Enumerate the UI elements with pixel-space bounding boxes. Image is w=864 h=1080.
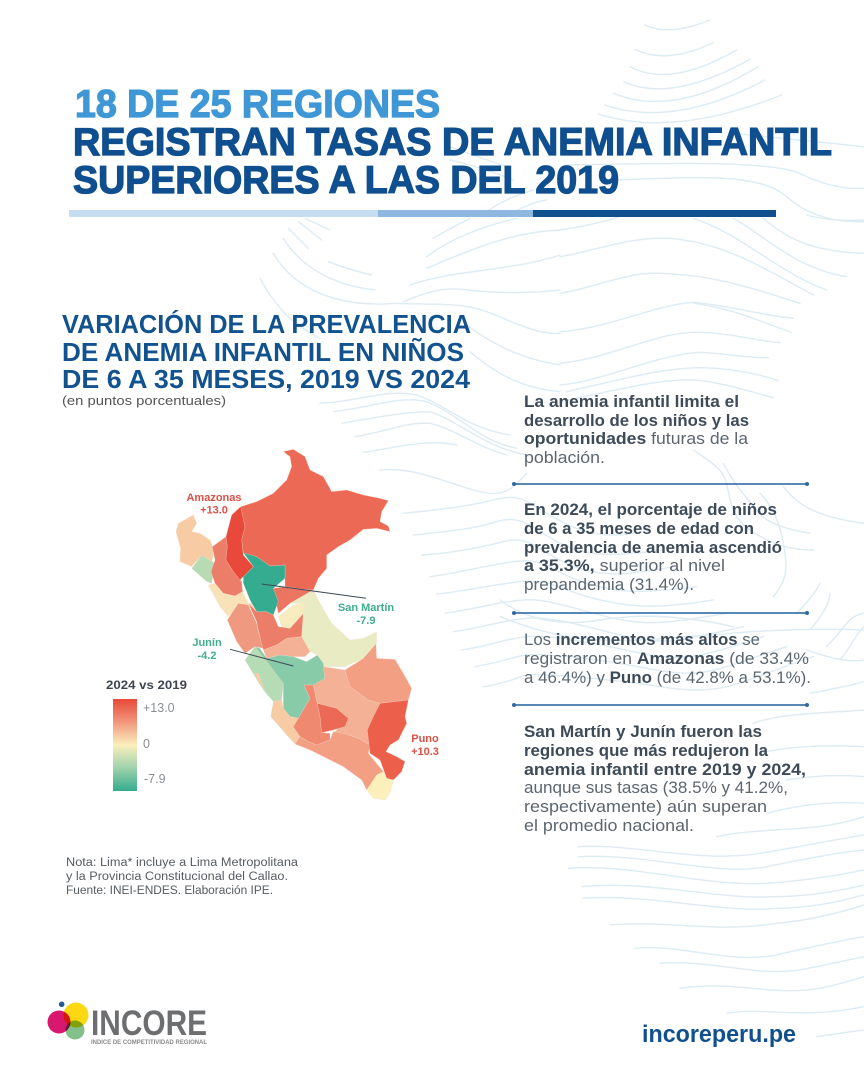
chart heading: DE ANEMIA INFANTIL EN NIÑOS [62, 337, 464, 367]
paragraph 1 [524, 393, 749, 467]
title: REGISTRAN TASAS DE ANEMIA INFANTIL [73, 121, 832, 164]
chart heading: DE 6 A 35 MESES, 2019 VS 2024 [62, 366, 471, 394]
paragraph 1: oportunidades futuras de la [524, 430, 749, 448]
paragraph 1: La anemia infantil limita el [524, 393, 739, 411]
chart heading [62, 309, 471, 394]
legend: +13.0 [143, 701, 175, 715]
title underline bar [69, 210, 776, 217]
paragraph 4: anemia infantil entre 2019 y 2024, [524, 761, 806, 779]
region: cream central [278, 603, 305, 628]
region: coast strip [254, 673, 265, 692]
paragraph 2 [524, 501, 782, 594]
region: Arequipa [295, 732, 383, 790]
label: Puno: +10.3 [411, 746, 439, 758]
label: San Martin [338, 602, 394, 627]
region: San Martin [243, 553, 285, 615]
leader line: San Martin [262, 584, 366, 598]
paragraph 4: San Martín y Junín fueron las [524, 723, 762, 741]
paragraph 1: población. [524, 449, 605, 467]
icon: overlapping circles [48, 1002, 88, 1040]
region: Tacna [367, 772, 393, 800]
footnote [66, 857, 299, 897]
region: Cajamarca [211, 537, 243, 596]
paragraph 4: regiones que más redujeron la [524, 742, 769, 760]
paragraph 2: prepandemia (31.4%). [524, 576, 694, 594]
leader line: Junin [230, 649, 293, 666]
legend [106, 680, 187, 791]
region: Ica [271, 700, 300, 744]
label: San Martin: San Martín [338, 602, 394, 614]
region: Piura [176, 515, 213, 567]
paragraph 3: registraron en Amazonas (de 33.4% [524, 650, 809, 668]
region: Cusco [313, 667, 380, 745]
footnote: y la Provincia Constitucional del Callao. [66, 871, 288, 883]
logo: INCORE [48, 1002, 207, 1046]
region: Apurimac [317, 703, 348, 733]
website: incoreperu.pe [642, 1021, 796, 1048]
paragraph 4 [524, 723, 806, 835]
label: Junin: -4.2 [198, 650, 216, 662]
region: Ucayali [290, 590, 377, 667]
logo: INCORE: INCORE [91, 1004, 207, 1043]
paragraph 2: de 6 a 35 meses de edad con [524, 520, 754, 538]
title: 18 DE 25 REGIONES [75, 83, 440, 126]
region: Ucayali norte [273, 587, 313, 613]
legend: 0 [143, 737, 150, 751]
paragraph 3: Los incrementos más altos se [524, 631, 760, 649]
logo: INCORE: INDICE DE COMPETITIVIDAD REGIONAL [91, 1040, 207, 1046]
divider [512, 611, 809, 615]
paragraph 1: desarrollo de los niños y las [524, 412, 749, 430]
footnote: Fuente: INEI-ENDES. Elaboración IPE. [66, 885, 273, 897]
label: Junin [192, 637, 222, 662]
region: Puno [367, 700, 408, 780]
paragraph 2: a 35.3%, superior al nivel [524, 557, 725, 575]
region: Madre de Dios [345, 644, 412, 703]
paragraph 3 [524, 631, 811, 687]
label: Puno: Puno [411, 733, 439, 745]
legend: -7.9 [144, 772, 166, 786]
region: Lambayeque [192, 555, 215, 583]
region: Lima [245, 647, 283, 702]
paragraph 3: a 46.4%) y Puno (de 42.8% a 53.1%). [524, 669, 811, 687]
region: Ayacucho [293, 685, 330, 745]
label: Amazonas [186, 492, 242, 516]
region: Pasco [263, 637, 310, 658]
title [73, 83, 832, 202]
region: Ancash [227, 603, 263, 653]
label: Junin: Junín [192, 637, 222, 649]
region: Huanuco [248, 603, 303, 650]
divider [512, 703, 809, 707]
region: Amazonas [226, 507, 253, 580]
paragraph 4: aunque sus tasas (38.5% y 41.2%, [524, 779, 788, 797]
paragraph 2: En 2024, el porcentaje de niños [524, 501, 777, 519]
region: Loreto [241, 449, 390, 590]
region: La Libertad [208, 583, 258, 617]
paragraph 2: prevalencia de anemia ascendió [524, 539, 782, 557]
region: Junin [255, 647, 325, 718]
label: Amazonas: Amazonas [186, 492, 242, 504]
paragraph 4: el promedio nacional. [524, 817, 694, 835]
divider [512, 482, 809, 486]
chart heading: VARIACIÓN DE LA PREVALENCIA [62, 309, 471, 339]
title: SUPERIORES A LAS DEL 2019 [73, 159, 619, 202]
legend: 2024 vs 2019 [106, 680, 187, 692]
label: Amazonas: +13.0 [200, 504, 228, 516]
footnote: Nota: Lima* incluye a Lima Metropolitana [66, 857, 299, 869]
map of Peru [176, 449, 412, 800]
chart subtitle: (en puntos porcentuales) [62, 393, 226, 408]
label: Puno [411, 733, 439, 758]
paragraph 4: respectivamente) aún superan [524, 798, 767, 816]
label: San Martin: -7.9 [357, 615, 375, 627]
